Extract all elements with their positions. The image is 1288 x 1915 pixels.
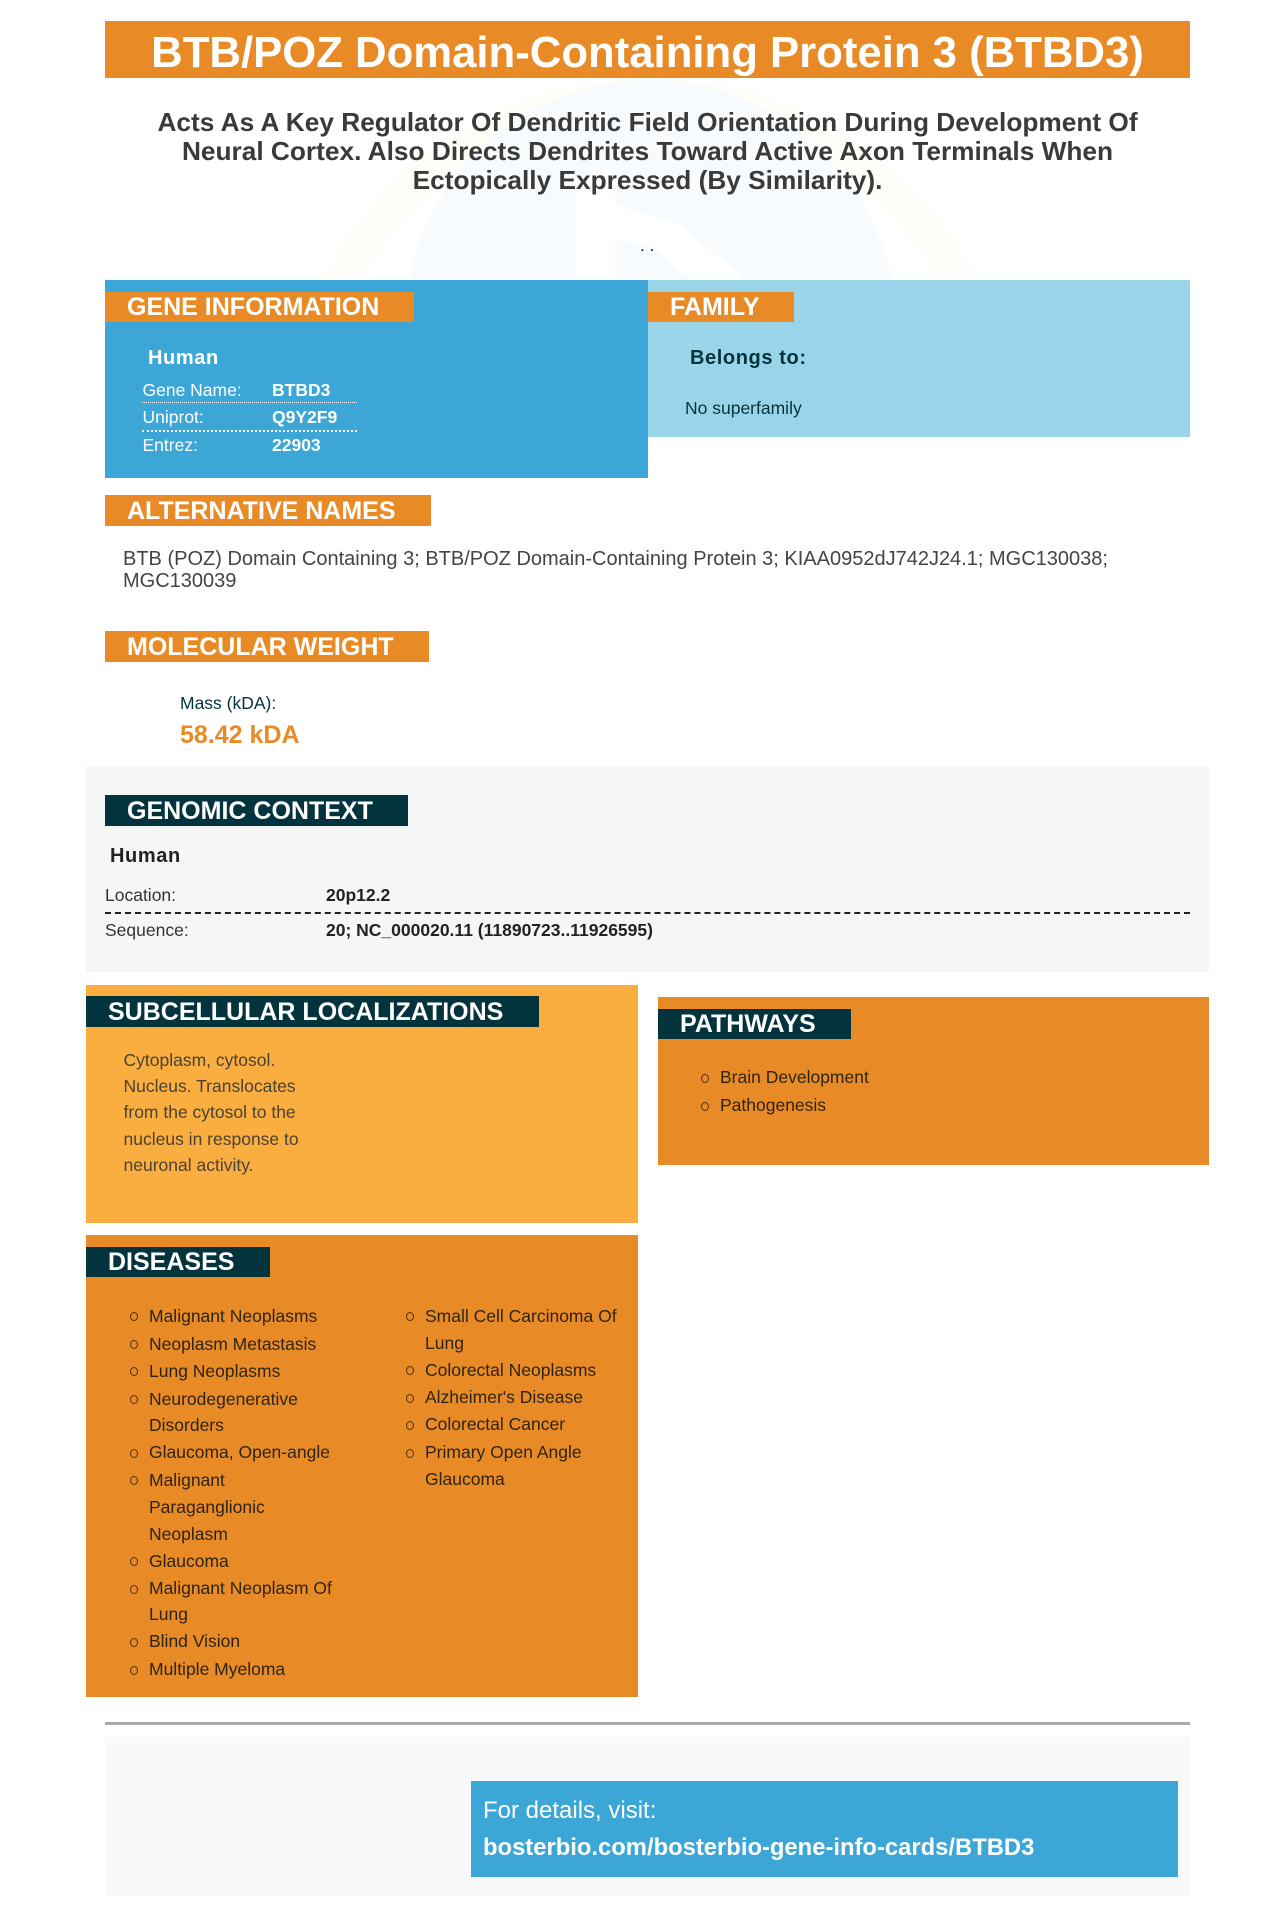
disease list column 1: Disorders bbox=[149, 1414, 224, 1434]
subtitle description bbox=[157, 107, 1138, 195]
heading: pathways: PATHWAYS bbox=[680, 1010, 816, 1038]
disease list column 2: Colorectal Cancer bbox=[425, 1414, 565, 1434]
disease list column 1: Multiple Myeloma bbox=[149, 1659, 285, 1679]
panel: footer bbox=[105, 1737, 1190, 1896]
disease list column 1: Paraganglionic bbox=[149, 1496, 265, 1516]
subtitle description: Acts As A Key Regulator Of Dendritic Field Orientation During Development Of bbox=[157, 107, 1138, 137]
heading: family bbox=[648, 292, 794, 322]
heading: pathways bbox=[658, 1009, 851, 1039]
panel: diseases bbox=[86, 1235, 638, 1697]
disease list column 1: Neoplasm bbox=[149, 1524, 228, 1544]
pathway list: Pathogenesis bbox=[720, 1095, 826, 1115]
panel: subcellular localizations bbox=[86, 985, 638, 1223]
localization text: from the cytosol to the bbox=[124, 1102, 296, 1122]
disease list column 2: Small Cell Carcinoma Of bbox=[425, 1306, 617, 1326]
species label: Human bbox=[148, 347, 219, 369]
gene name row: Gene Name: bbox=[142, 380, 242, 400]
disease list column 1: Malignant Neoplasms bbox=[149, 1306, 317, 1326]
panel: family bbox=[648, 280, 1190, 437]
belongs to label: Belongs to: bbox=[690, 347, 807, 369]
panel: gene information: BTBD3 bbox=[272, 380, 330, 400]
disease list column 1: Lung bbox=[149, 1604, 188, 1624]
title: BTB/POZ Domain-Containing Protein 3 (BTBD3) bbox=[151, 28, 1144, 77]
panel: genomic context: 20p12.2 bbox=[326, 885, 390, 905]
disease list column 1: Malignant Neoplasm Of bbox=[149, 1578, 332, 1598]
panel: gene information: Q9Y2F9 bbox=[272, 406, 337, 426]
panel: gene information bbox=[105, 280, 648, 478]
disease list column 2: Colorectal Neoplasms bbox=[425, 1360, 596, 1380]
alternative names text: MGC130039 bbox=[123, 570, 236, 592]
alternative names text bbox=[123, 548, 1108, 592]
entrez row: Entrez: bbox=[142, 434, 198, 454]
heading: molecular weight: MOLECULAR WEIGHT bbox=[127, 633, 394, 661]
panel: genomic context bbox=[86, 766, 1209, 972]
heading: diseases: DISEASES bbox=[108, 1248, 234, 1276]
background logo watermark bbox=[0, 78, 1288, 280]
disease list column 2 bbox=[406, 1306, 617, 1489]
disease list column 1: Malignant bbox=[149, 1470, 225, 1490]
heading: genomic context: GENOMIC CONTEXT bbox=[127, 797, 373, 825]
disease list column 1: Blind Vision bbox=[149, 1631, 240, 1651]
sequence row: Sequence: bbox=[105, 920, 189, 940]
details url: bosterbio.com/bosterbio-gene-info-cards/BTBD3 bbox=[483, 1834, 1034, 1861]
heading: family: FAMILY bbox=[670, 293, 759, 321]
alternative names text: BTB (POZ) Domain Containing 3; BTB/POZ Domain-Containing Protein 3; KIAA0952dJ742J24.1; MGC130038; bbox=[123, 548, 1108, 570]
mass label: Mass (kDA): bbox=[180, 692, 276, 712]
disease list column 2: Glaucoma bbox=[425, 1469, 505, 1489]
localization text: neuronal activity. bbox=[124, 1155, 254, 1175]
localization text: Nucleus. Translocates bbox=[124, 1076, 296, 1096]
disease list column 1: Neoplasm Metastasis bbox=[149, 1334, 316, 1354]
pathway list bbox=[701, 1067, 869, 1115]
heading: subcellular localizations: SUBCELLULAR LOCALIZATIONS bbox=[108, 998, 503, 1026]
disease list column 2: Alzheimer's Disease bbox=[425, 1387, 583, 1407]
molecular mass bbox=[180, 692, 300, 749]
disease list column 1: Glaucoma bbox=[149, 1550, 229, 1570]
location row: Location: bbox=[105, 885, 176, 905]
heading: diseases bbox=[86, 1247, 270, 1277]
pathway list: Brain Development bbox=[720, 1067, 869, 1087]
family value: No superfamily bbox=[685, 398, 802, 418]
species label: Human bbox=[110, 845, 181, 867]
heading: alternative names: ALTERNATIVE NAMES bbox=[127, 497, 396, 525]
disease list column 2: Primary Open Angle bbox=[425, 1442, 582, 1462]
localization text: Cytoplasm, cytosol. bbox=[124, 1050, 275, 1070]
subtitle description: Neural Cortex. Also Directs Dendrites Toward Active Axon Terminals When bbox=[182, 136, 1113, 166]
panel: pathways bbox=[658, 997, 1209, 1165]
heading: gene information: GENE INFORMATION bbox=[127, 293, 379, 321]
small dots text: . . bbox=[640, 236, 654, 255]
disease list column 1: Neurodegenerative bbox=[149, 1388, 298, 1408]
panel: gene information: 22903 bbox=[272, 434, 321, 454]
callout: details link bbox=[471, 1781, 1178, 1877]
mass value: 58.42 kDA bbox=[180, 721, 300, 749]
subtitle description: Ectopically Expressed (By Similarity). bbox=[413, 165, 882, 195]
panel: genomic context: 20; NC_000020.11 (11890723..11926595) bbox=[326, 920, 653, 940]
details label: For details, visit: bbox=[483, 1797, 656, 1824]
disease list column 1: Lung Neoplasms bbox=[149, 1360, 280, 1380]
disease list column 1 bbox=[130, 1306, 332, 1679]
localization text: nucleus in response to bbox=[124, 1129, 299, 1149]
localization text bbox=[124, 1050, 299, 1175]
uniprot row: Uniprot: bbox=[142, 406, 204, 426]
disease list column 1: Glaucoma, Open-angle bbox=[149, 1442, 330, 1462]
disease list column 2: Lung bbox=[425, 1332, 464, 1352]
